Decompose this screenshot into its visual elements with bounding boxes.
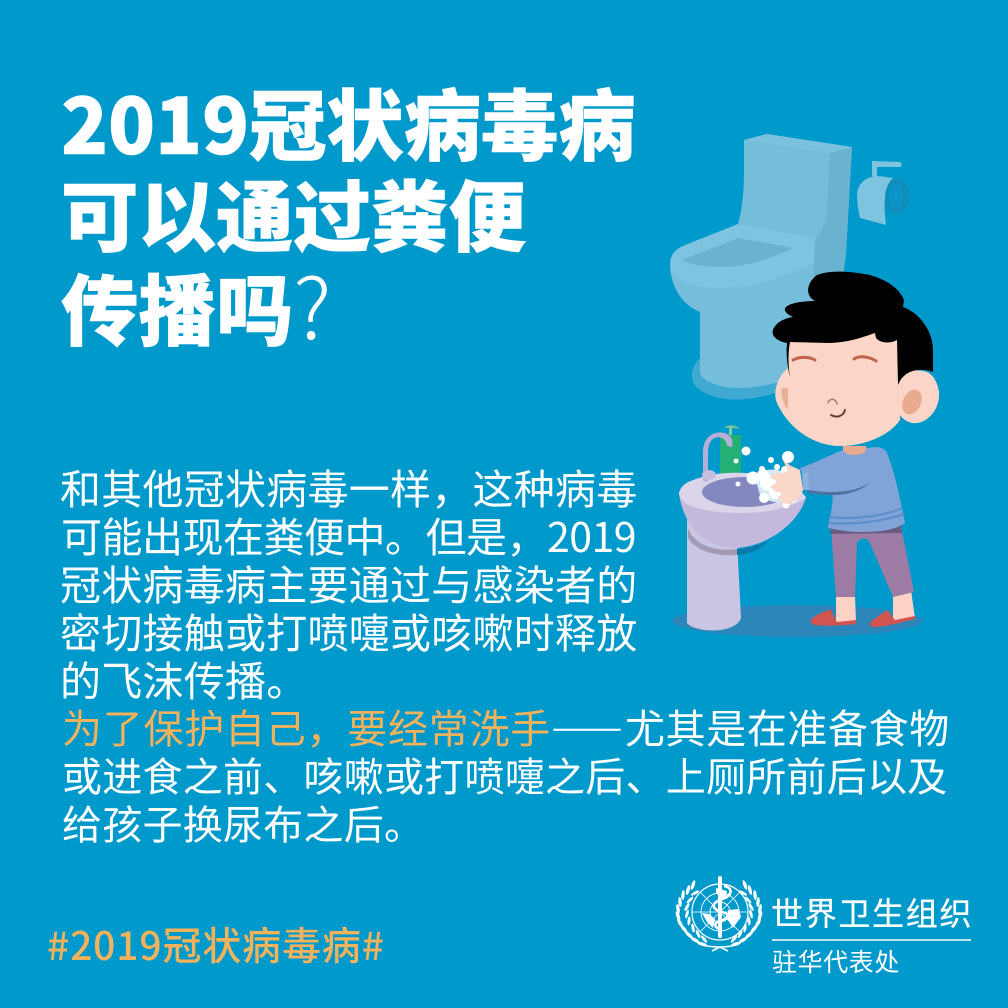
boy: legs	[830, 525, 915, 622]
hashtag: #2019冠状病毒病#	[47, 916, 385, 972]
title	[61, 65, 636, 364]
WHO office: 驻华代表处	[772, 943, 900, 979]
floor shadow	[672, 605, 922, 637]
body text: first paragraph: 冠状病毒病主要通过与感染者的	[60, 552, 638, 612]
icon: washbasin	[679, 432, 806, 630]
boy: slippers	[811, 609, 915, 627]
WHO divider	[772, 939, 971, 941]
body text: advice paragraph: 为了保护自己，要经常洗手——尤其是在准备食物	[62, 697, 950, 755]
body text: first paragraph: 和其他冠状病毒一样，这种病毒	[60, 456, 638, 516]
title: 2019冠状病毒病	[61, 65, 636, 177]
boy: head	[775, 330, 939, 446]
title: 传播吗?	[61, 243, 331, 364]
body text: first paragraph: 的飞沫传播。	[60, 648, 308, 708]
title: 可以通过粪便	[61, 156, 526, 268]
boy: hair	[773, 272, 933, 385]
boy: foam and hands	[734, 446, 803, 508]
icon: toilet paper roll	[857, 161, 909, 225]
WHO logo emblem	[676, 876, 762, 952]
boy: sweater	[800, 446, 905, 532]
body text: first paragraph: 密切接触或打喷嚏或咳嗽时释放	[60, 600, 638, 660]
body text: advice paragraph: 或进食之前、咳嗽或打喷嚏之后、上厕所前后以及	[62, 745, 948, 803]
body text: advice paragraph	[62, 697, 950, 851]
icon: toilet	[670, 134, 852, 399]
body text: first paragraph: 可能出现在粪便中。但是，2019	[61, 504, 636, 564]
body text: advice paragraph: 给孩子换尿布之后。	[62, 793, 424, 851]
body text: first paragraph	[60, 456, 638, 708]
WHO name: 世界卫生组织	[771, 889, 973, 935]
icon: soap bottle	[720, 425, 741, 477]
